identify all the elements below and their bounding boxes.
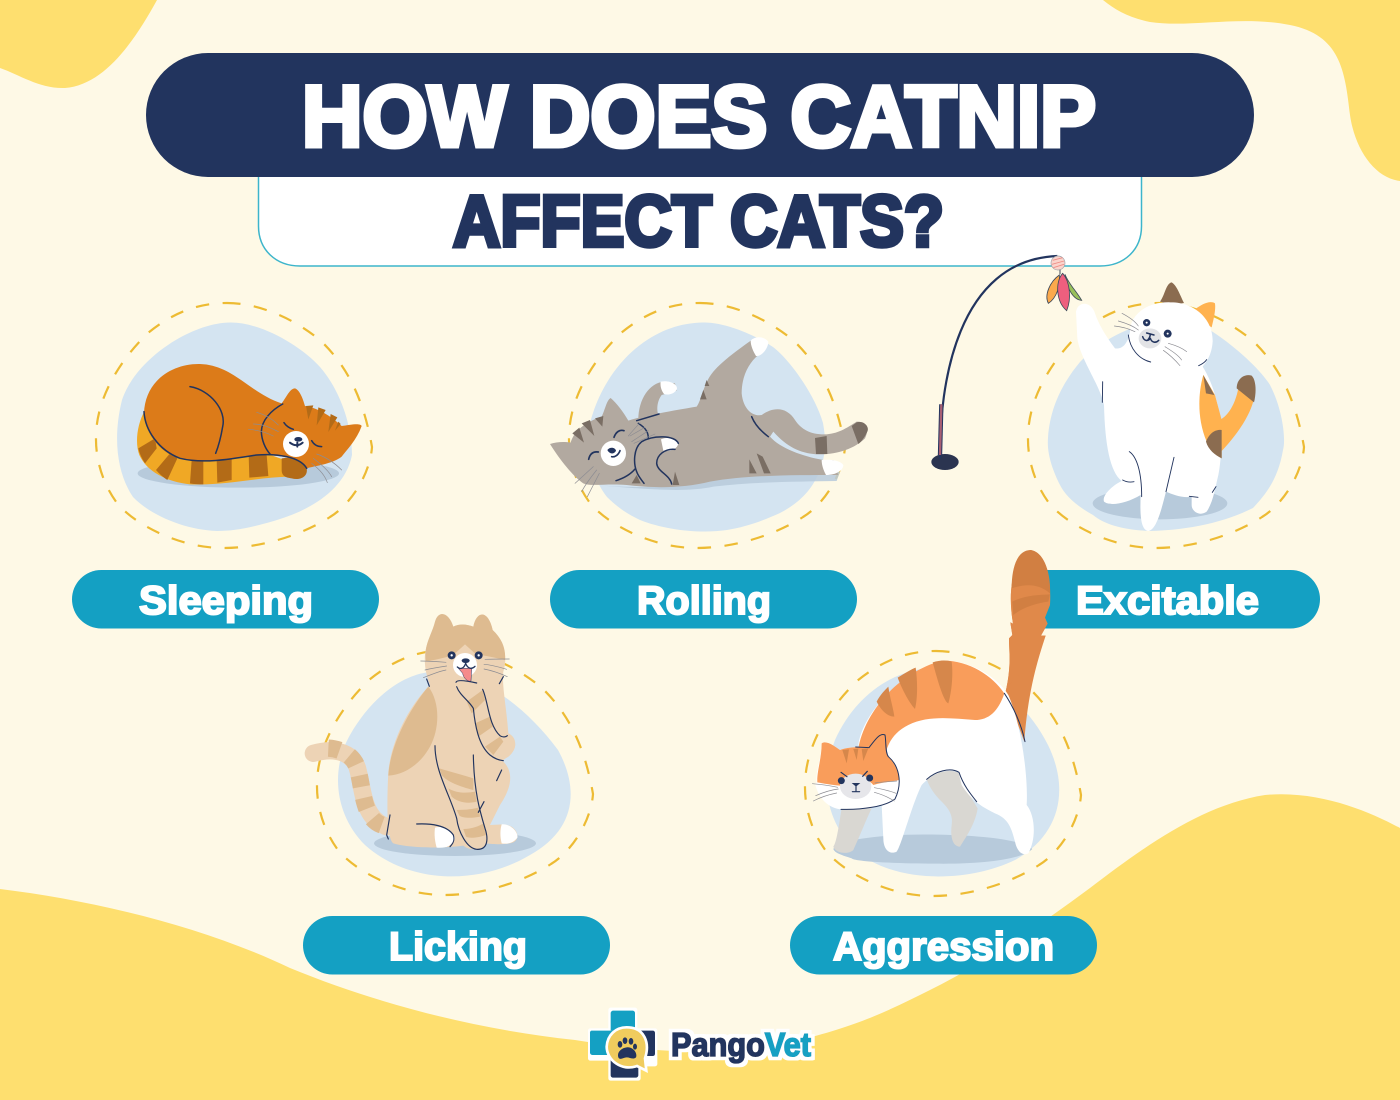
panel: excitable — [931, 256, 1304, 548]
legs — [833, 808, 872, 853]
dashed ring — [1028, 303, 1304, 548]
aggressive cat — [812, 550, 1050, 864]
logo: PangoVet — [590, 1010, 811, 1078]
body — [387, 615, 517, 849]
backdrop blob — [117, 322, 352, 531]
excitable cat with wand toy — [931, 256, 1256, 531]
title: subtitle panel — [258, 170, 1142, 266]
head — [815, 734, 899, 809]
label pill: sleeping — [72, 570, 379, 628]
panel: aggression — [805, 550, 1081, 896]
backdrop blob — [588, 322, 825, 532]
label pill: licking: Licking — [389, 925, 527, 969]
tail — [313, 751, 387, 827]
label pill: sleeping: Sleeping — [139, 579, 313, 623]
backdrop blob — [1048, 321, 1284, 531]
dashed ring — [96, 303, 372, 548]
dashed ring — [317, 650, 593, 895]
backdrop blob — [827, 668, 1059, 876]
background blob: bottom wave — [0, 794, 1400, 1100]
dashed ring — [805, 651, 1081, 896]
sleeping cat — [137, 364, 362, 488]
panel: sleeping — [96, 303, 372, 548]
title text: HOW DOES CATNIP — [302, 69, 1096, 165]
icon: medical cross with paw — [590, 1010, 655, 1078]
body — [858, 661, 1034, 854]
panel: rolling — [550, 303, 868, 548]
logo wordmark: PangoVet — [671, 1026, 811, 1063]
background blob: top right — [1103, 0, 1400, 181]
rolling cat — [550, 337, 868, 497]
label pill: licking — [303, 916, 610, 974]
label pill: excitable: Excitable — [1076, 579, 1259, 623]
panel: licking — [313, 614, 593, 895]
licking cat — [313, 614, 536, 856]
label pill: rolling — [550, 570, 857, 628]
dashed ring — [569, 303, 845, 548]
label pill: aggression — [790, 916, 1097, 974]
subtitle text: AFFECT CATS? — [453, 182, 944, 262]
label pill: aggression: Aggression — [833, 925, 1054, 969]
title: banner — [146, 53, 1254, 177]
tail tip overlapping excitable pill — [1006, 550, 1050, 692]
backdrop blob — [338, 672, 571, 876]
tail base — [1006, 550, 1050, 742]
label pill: excitable — [1013, 570, 1320, 628]
background blob: top left — [0, 0, 157, 88]
label pill: rolling: Rolling — [637, 579, 771, 623]
icon: feather wand toy — [931, 256, 1082, 470]
